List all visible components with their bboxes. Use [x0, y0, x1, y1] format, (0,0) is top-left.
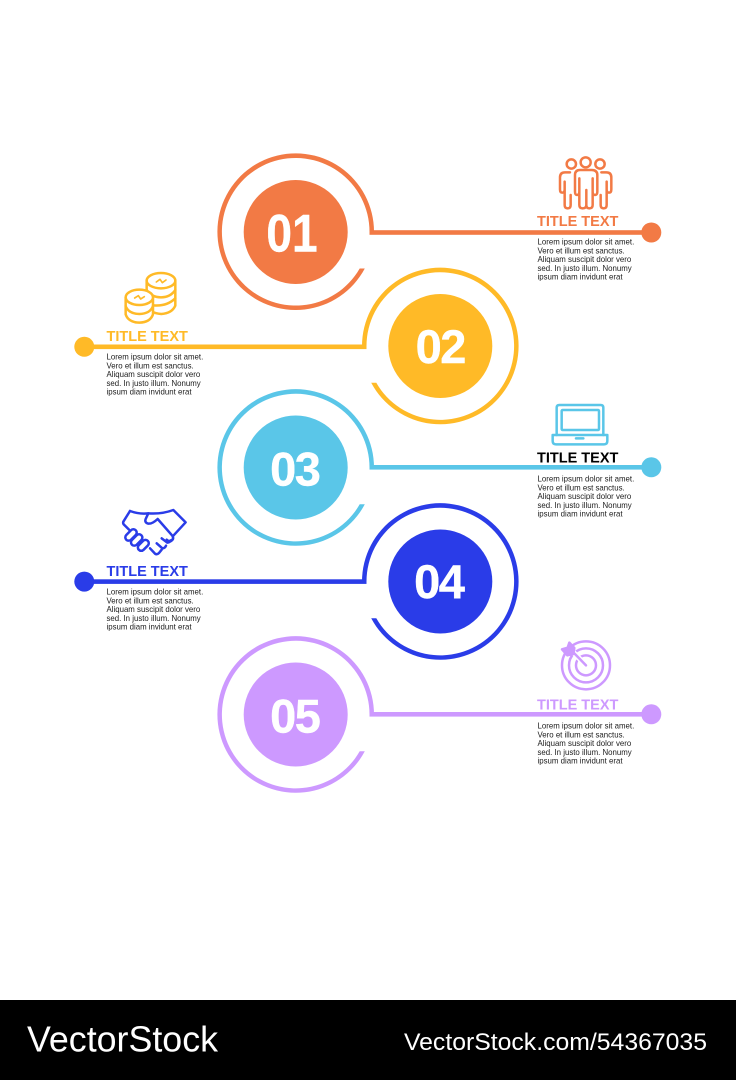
- end dot 01: [641, 222, 661, 242]
- end dot 03: [641, 457, 661, 477]
- title 05: TITLE TEXT: [537, 698, 618, 714]
- body text 04: Vero et illum est sanctus.: [106, 596, 194, 605]
- icon: laptop: [553, 405, 607, 444]
- connector line 03: [370, 465, 652, 470]
- body text 03: Vero et illum est sanctus.: [538, 483, 625, 492]
- end dot 04: [74, 572, 94, 592]
- body text 03: ipsum diam invidunt erat: [538, 510, 623, 519]
- ring 05: [217, 636, 374, 793]
- watermark logo text: VectorStock: [27, 1018, 219, 1060]
- body text 04: Aliquam suscipit dolor vero: [106, 605, 201, 614]
- ring 02: [362, 268, 519, 424]
- icon: coins: [126, 273, 175, 323]
- title 04: TITLE TEXT: [106, 564, 188, 580]
- body text 02: Lorem ipsum dolor sit amet.: [106, 352, 203, 362]
- connector line 02: [84, 344, 366, 349]
- end dot 02: [74, 337, 94, 357]
- number badge 03: 03: [270, 442, 320, 496]
- connector line 01: [370, 230, 652, 235]
- step 03 panel: [217, 389, 661, 546]
- body text 01: Lorem ipsum dolor sit amet.: [538, 238, 634, 246]
- body text 05: Vero et illum est sanctus.: [538, 730, 625, 739]
- body text 05: Aliquam suscipit dolor vero: [538, 739, 632, 748]
- icon: handshake: [123, 510, 186, 554]
- icon: target with arrow: [562, 641, 610, 689]
- body text 02: Aliquam suscipit dolor vero: [106, 370, 201, 379]
- number badge 03: [244, 416, 348, 520]
- number badge 04: [388, 530, 492, 634]
- ring 04: [362, 503, 519, 660]
- body text 02: Vero et illum est sanctus.: [106, 361, 194, 370]
- number badge 02: [388, 294, 492, 398]
- step 05 panel: [217, 636, 661, 793]
- number badge 05: 05: [270, 690, 320, 742]
- body text 04: Lorem ipsum dolor sit amet.: [106, 588, 203, 596]
- body text 01: Vero et illum est sanctus.: [538, 246, 625, 255]
- connector line 05: [370, 712, 652, 717]
- body text 01: ipsum diam invidunt erat: [538, 273, 623, 282]
- body text 04: ipsum diam invidunt erat: [106, 623, 192, 632]
- body text 05: ipsum diam invidunt erat: [538, 757, 623, 766]
- body text 02: ipsum diam invidunt erat: [106, 388, 192, 397]
- title 02: TITLE TEXT: [106, 329, 188, 345]
- body text 05: Lorem ipsum dolor sit amet.: [538, 722, 634, 730]
- body text 03: Lorem ipsum dolor sit amet.: [538, 474, 634, 484]
- number badge 01: 01: [266, 203, 318, 263]
- connector line 04: [84, 579, 366, 584]
- ring 01: [217, 153, 374, 310]
- title 01: TITLE TEXT: [537, 214, 618, 230]
- body text 03: Aliquam suscipit dolor vero: [538, 492, 632, 501]
- watermark footer bar: [0, 1000, 736, 1080]
- title 03: TITLE TEXT: [537, 450, 618, 466]
- step 02 panel: [74, 268, 519, 424]
- body text 01: Aliquam suscipit dolor vero: [538, 255, 632, 264]
- number badge 02: 02: [416, 320, 465, 373]
- step 04 panel: [74, 503, 519, 660]
- watermark url text: VectorStock.com/54367035: [404, 1029, 707, 1056]
- body text 04: sed. In justo illum. Nonumy: [106, 614, 201, 623]
- number badge 01: [244, 180, 348, 284]
- body text 02: sed. In justo illum. Nonumy: [106, 379, 201, 388]
- step 01 panel: [217, 153, 661, 310]
- body text 05: sed. In justo illum. Nonumy: [538, 748, 632, 757]
- number badge 04: 04: [414, 555, 465, 608]
- icon: people: [560, 157, 611, 208]
- number badge 05: [244, 662, 348, 766]
- end dot 05: [641, 704, 661, 724]
- body text 01: sed. In justo illum. Nonumy: [538, 264, 632, 273]
- body text 03: sed. In justo illum. Nonumy: [538, 501, 632, 510]
- ring 03: [217, 389, 374, 546]
